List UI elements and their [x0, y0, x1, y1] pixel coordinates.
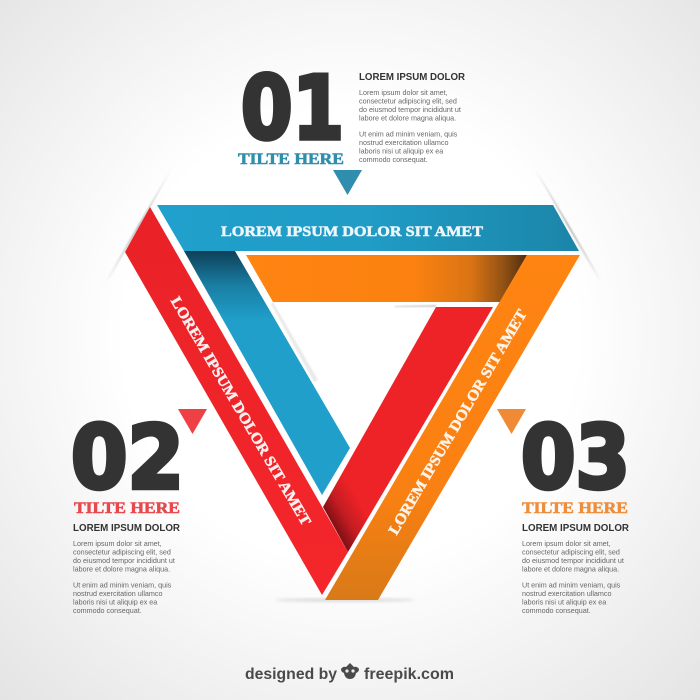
- body text 01: commodo consequat.: [359, 155, 428, 164]
- icon: freepik mascot: [341, 663, 359, 679]
- body text 03: nostrud exercitation ullamco: [522, 589, 612, 598]
- body text 03: consectetur adipiscing elit, sed: [522, 548, 620, 556]
- body text 02: consectetur adipiscing elit, sed: [73, 548, 171, 556]
- body text 03: laboris nisi ut aliquip ex ea: [522, 598, 606, 606]
- body text 02: Ut enim ad minim veniam, quis: [73, 580, 172, 590]
- freepik.com text: freepik.com: [364, 666, 454, 683]
- section 02: [71, 407, 207, 615]
- blue ribbon: diagonal part: [184, 251, 350, 495]
- body text 03: Ut enim ad minim veniam, quis: [522, 580, 621, 590]
- body text 02: do eiusmod tempor incididunt ut: [73, 556, 175, 565]
- body text 01: Ut enim ad minim veniam, quis: [359, 130, 458, 138]
- arrow 03: [497, 409, 526, 434]
- red ribbon: rising part: [323, 307, 493, 552]
- body text 03: Lorem ipsum dolor sit amet,: [522, 539, 611, 548]
- title 02: TILTE HERE: [74, 500, 180, 517]
- body text 02: laboris nisi ut aliquip ex ea: [73, 598, 157, 606]
- orange ribbon: long diagonal part: [325, 255, 580, 600]
- title 01: TILTE HERE: [238, 151, 344, 168]
- body text 01: laboris nisi ut aliquip ex ea: [359, 146, 443, 156]
- arrow 01: [333, 170, 362, 195]
- title 03: TILTE HERE: [522, 500, 628, 517]
- heading 03: LOREM IPSUM DOLOR: [522, 522, 629, 534]
- body text 01: [359, 88, 461, 164]
- red band label: LOREM IPSUM DOLOR SIT AMET: [167, 294, 313, 529]
- body text 02: commodo consequat.: [73, 606, 142, 615]
- body text 01: labore et dolore magna aliqua.: [359, 114, 456, 122]
- orange ribbon: horizontal bar: [246, 255, 527, 302]
- body text 01: nostrud exercitation ullamco: [359, 138, 448, 147]
- section 03: [497, 407, 630, 615]
- impossible triangle: [125, 205, 580, 600]
- footer credit: [245, 663, 454, 683]
- number 03: 03: [521, 407, 630, 509]
- body text 01: Lorem ipsum dolor sit amet,: [359, 88, 448, 97]
- body text 02: labore et dolore magna aliqua.: [73, 564, 170, 574]
- number 02: 02: [71, 407, 184, 509]
- body text 03: commodo consequat.: [522, 606, 591, 615]
- body text 02: nostrud exercitation ullamco: [73, 589, 162, 598]
- body text 02: [73, 539, 175, 615]
- body text 01: do eiusmod tempor incididunt ut: [359, 105, 461, 114]
- paper fold shadows: [105, 169, 602, 602]
- number 01: 01: [241, 58, 344, 160]
- body text 02: Lorem ipsum dolor sit amet,: [73, 539, 162, 548]
- red ribbon: long diagonal part: [125, 207, 348, 595]
- body text 03: [522, 539, 624, 615]
- body text 03: do eiusmod tempor incididunt ut: [522, 556, 624, 565]
- orange band label: LOREM IPSUM DOLOR SIT AMET: [386, 307, 531, 538]
- heading 02: LOREM IPSUM DOLOR: [73, 522, 180, 534]
- designed by text: designed by: [245, 666, 337, 683]
- arrow 02: [178, 409, 207, 434]
- body text 01: consectetur adipiscing elit, sed: [359, 96, 457, 106]
- section 01: [238, 58, 465, 195]
- body text 03: labore et dolore magna aliqua.: [522, 564, 619, 574]
- top band label: LOREM IPSUM DOLOR SIT AMET: [221, 224, 483, 240]
- heading 01: LOREM IPSUM DOLOR: [359, 71, 465, 83]
- blue ribbon: top band: [157, 205, 579, 251]
